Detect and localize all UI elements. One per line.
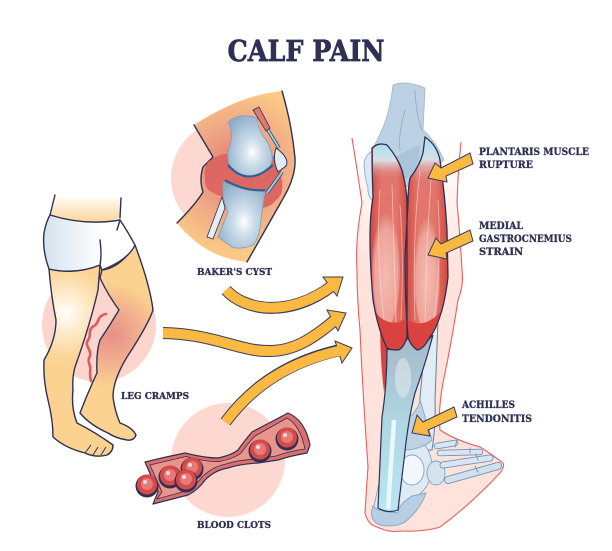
muscle outlines	[370, 137, 448, 350]
leg skin	[352, 138, 504, 532]
arrow: plantaris	[428, 153, 473, 182]
achilles tendon	[378, 335, 433, 512]
label: achilles tendonitis	[461, 400, 532, 425]
label: LEG CRAMPS	[121, 391, 189, 402]
arrow: blood clots to leg	[226, 341, 352, 422]
torso	[50, 195, 121, 222]
front leg	[44, 265, 113, 456]
femur	[371, 83, 444, 200]
background circle: knee	[171, 120, 287, 236]
label: plantaris muscle rupture: RUPTURE	[479, 160, 533, 171]
toes	[85, 445, 106, 455]
clot cells	[136, 428, 298, 498]
panel: leg anatomy	[352, 83, 504, 532]
shorts	[44, 215, 135, 271]
cramp squiggle	[87, 314, 106, 381]
soleus red strip	[380, 320, 392, 392]
foot bones	[437, 440, 498, 480]
muscle bottom red	[375, 312, 407, 350]
femoral condyle	[364, 150, 375, 203]
cyst swelling	[204, 154, 282, 208]
tendons and patella	[253, 107, 270, 131]
muscle striations	[379, 170, 439, 322]
label: plantaris muscle rupture	[479, 147, 589, 171]
label: medial gastrocnemius strain: GASTROCNEMIUS	[479, 234, 572, 245]
title: CALF PAIN	[228, 34, 384, 68]
cartilage	[228, 165, 273, 176]
ankle bones	[381, 400, 432, 452]
arrow: medial gastrocnemius	[428, 230, 473, 259]
label: achilles tendonitis: TENDONITIS	[462, 414, 532, 425]
gastrocnemius medial head	[405, 137, 448, 350]
fibula and shin bone	[419, 310, 438, 450]
label: plantaris muscle rupture: PLANTARIS MUSCLE	[479, 147, 589, 158]
gastrocnemius lateral head	[370, 144, 408, 350]
panel: blood clots	[136, 403, 310, 531]
background circle: vessel	[171, 403, 285, 517]
arrow: achilles	[412, 407, 457, 436]
fibula	[207, 197, 225, 239]
label: BLOOD CLOTS	[197, 520, 271, 531]
muscle belly highlights	[372, 212, 400, 328]
label: medial gastrocnemius strain	[479, 221, 572, 258]
vessel interior	[150, 418, 305, 499]
arrow: baker's cyst to leg	[226, 277, 343, 308]
tibia	[218, 182, 265, 248]
muscle top tendons	[373, 144, 402, 180]
label: medial gastrocnemius strain: MEDIAL	[479, 221, 523, 232]
label: BAKER'S CYST	[197, 267, 272, 278]
arrow: leg cramps to leg	[163, 310, 346, 351]
femur	[228, 116, 272, 177]
knee skin	[177, 91, 295, 262]
label: medial gastrocnemius strain: STRAIN	[479, 247, 523, 258]
back leg	[80, 245, 153, 440]
blood vessel	[145, 413, 310, 504]
panel: baker's cyst	[171, 91, 295, 278]
background circle: legs	[42, 268, 156, 382]
label: achilles tendonitis: ACHILLES	[461, 400, 515, 411]
panel: leg cramps	[42, 195, 189, 456]
